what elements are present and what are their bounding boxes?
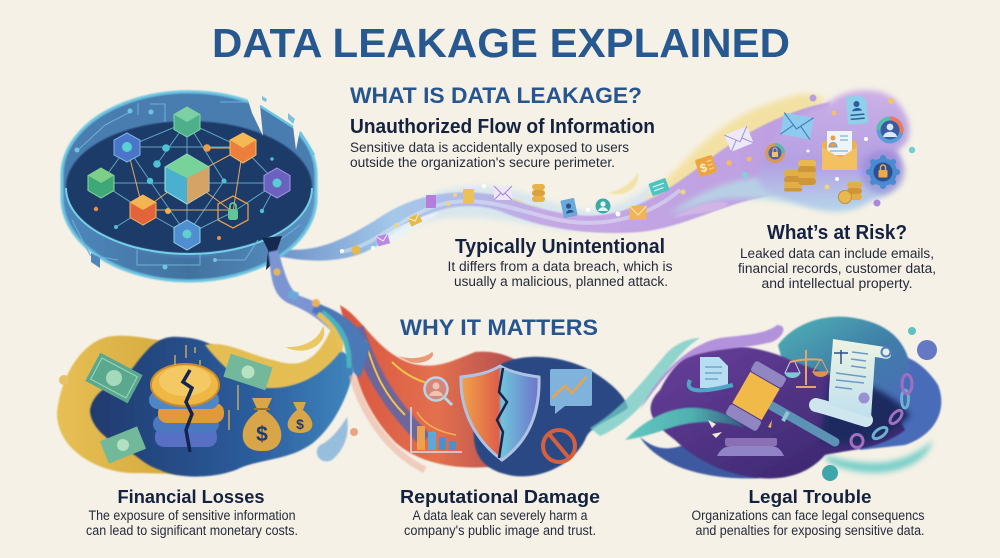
icon: coin card: [695, 155, 717, 177]
icon: banknote bottom left: [100, 426, 146, 464]
illustration: data stream flowing from the ring: [268, 90, 909, 261]
icon: lock gear large: [861, 150, 905, 194]
text block: legal trouble: Organizations can face legal consequencs: [692, 508, 925, 523]
icons on the data stream: [340, 94, 915, 254]
golden swoosh: [285, 326, 324, 351]
icon: impact sparks: [708, 420, 772, 438]
panel: reputational damage illustration: [340, 305, 628, 476]
icon: cracked coin stack: [149, 364, 224, 452]
icon: coin stacks: [784, 160, 816, 192]
icon: purple envelope: [376, 234, 390, 246]
icon: yellow document: [463, 189, 474, 204]
text block: what's at risk: [738, 222, 936, 291]
text block: what's at risk: What’s at Risk?: [767, 222, 907, 244]
teal inner stream: [625, 408, 745, 440]
icon: lock gear: [765, 143, 785, 163]
text block: unauthorized flow: outside the organization's secure perimeter.: [350, 155, 615, 170]
navy blob: [90, 337, 355, 477]
ring outer wall: [62, 92, 316, 281]
floating dots: [340, 94, 915, 253]
text block: financial losses: The exposure of sensitive information: [88, 508, 296, 523]
network links: [101, 122, 277, 235]
text block: legal trouble: Legal Trouble: [748, 486, 872, 507]
icon: no symbol: [543, 430, 575, 462]
teal blob: [778, 317, 909, 400]
data node: green left: [88, 168, 114, 198]
icon: yellow envelope: [408, 213, 422, 227]
ribbon teal band: [322, 312, 349, 368]
illustration: leak ribbon flowing down into the bottom panels: [268, 250, 370, 378]
purple swoosh: [640, 325, 783, 410]
icon: person card: [560, 198, 578, 218]
text block: unauthorized flow: [350, 116, 655, 170]
text block: financial losses: can lead to significant monetary costs.: [86, 523, 298, 538]
text block: what's at risk: Leaked data can include emails,: [740, 246, 934, 261]
text block: typically unintentional: Typically Unintentional: [455, 236, 665, 258]
icon: cracked shield: [461, 366, 539, 460]
data node: purple right: [264, 168, 290, 198]
gold blob: [57, 336, 178, 474]
icon: blue envelope: [780, 113, 814, 139]
broken wall fragments: [91, 96, 295, 268]
panel: financial losses illustration: [57, 325, 358, 477]
data node: orange lower: [130, 195, 156, 225]
text block: unauthorized flow: Sensitive data is accidentally exposed to users: [350, 140, 629, 155]
title: DATA LEAKAGE EXPLAINED: [212, 20, 790, 66]
purple blob: [651, 346, 905, 478]
icon: chat bubble trend: [550, 369, 592, 414]
icon: avatar circle: [596, 198, 610, 214]
icon: purple document: [426, 195, 436, 208]
icon: small coin stack: [838, 182, 862, 204]
illustration: data cloud blob: [758, 90, 909, 212]
ribbon small icons: [274, 268, 320, 307]
ribbon gold band: [318, 314, 340, 352]
text block: what's at risk: financial records, customer data,: [738, 261, 936, 276]
icon: coin: [352, 246, 360, 254]
data node: center: [165, 154, 209, 204]
text block: reputational damage: company's public image and trust.: [404, 523, 596, 538]
icon: document: [846, 95, 868, 125]
text block: unauthorized flow: Unauthorized Flow of Information: [350, 116, 655, 138]
data node: blue left: [114, 133, 140, 162]
fragment rim: [260, 106, 314, 155]
text block: reputational damage: Reputational Damage: [400, 486, 600, 507]
navy right lobe: [860, 354, 941, 450]
ring break lower right: [262, 236, 282, 270]
icon: money bag: $: [256, 423, 268, 446]
text block: typically unintentional: It differs from a data breach, which is: [448, 259, 673, 274]
data node: padlock hexagon: [218, 196, 248, 228]
icon: banknote top right: [223, 354, 273, 390]
icon: coin stack: [532, 184, 545, 202]
ring break upper right: [248, 85, 325, 155]
gold right band: [205, 325, 343, 388]
icon: falling bar chart: [411, 407, 462, 452]
text block: typically unintentional: [448, 236, 673, 289]
icon: teal card: [648, 178, 670, 196]
heading: what is data leakage: WHAT IS DATA LEAKAGE?: [350, 83, 642, 108]
network dots: [94, 144, 274, 240]
icon: white envelope: [725, 126, 753, 152]
icon: orange envelope: [630, 206, 646, 220]
ribbon gold streak: [365, 340, 435, 415]
text block: reputational damage: A data leak can severely harm a: [412, 508, 588, 523]
text block: what's at risk: and intellectual property.: [762, 276, 912, 291]
ribbon trunk: [268, 250, 358, 340]
ribbon fan: [312, 303, 370, 378]
navy lobe: [640, 437, 760, 478]
text block: legal trouble: [692, 486, 925, 538]
icon: magnifier person: [424, 378, 452, 405]
icon: open envelope: [822, 131, 857, 170]
text block: financial losses: Financial Losses: [118, 486, 264, 507]
data node: top green: [174, 107, 200, 137]
pale coral trail: [352, 375, 425, 470]
teardrop: [317, 417, 348, 461]
text block: reputational damage: [400, 486, 600, 538]
navy blob: [474, 357, 628, 476]
panel: legal trouble illustration: [590, 317, 941, 481]
icon: small money bag: $: [296, 416, 304, 432]
dot coral: [350, 428, 358, 436]
ring circuit traces: [72, 102, 300, 265]
icon: small money bag: [288, 402, 312, 433]
text block: financial losses: [86, 486, 298, 538]
data node: blue bottom: [174, 220, 200, 250]
icon: coin card: $: [698, 160, 709, 176]
icon: avatar ring: [876, 116, 904, 144]
dark center: [820, 375, 910, 444]
icon: legal scroll: [816, 339, 891, 420]
icon: lilac envelope: [494, 186, 512, 200]
red blob: [340, 305, 535, 467]
text block: typically unintentional: usually a malicious, planned attack.: [454, 274, 668, 289]
icon: gavel: [725, 360, 835, 442]
dot violet: [917, 340, 937, 360]
data node: orange right: [230, 133, 256, 163]
teal lower swoosh: [825, 440, 933, 473]
icon: document with arrow: [689, 357, 733, 390]
icon: money bag: [243, 398, 281, 451]
falling sparks: [175, 345, 238, 430]
icon: chain: [851, 374, 912, 448]
heading: why it matters: WHY IT MATTERS: [400, 315, 598, 340]
dark floor: [66, 121, 312, 253]
illustration: broken perimeter ring with data network: [62, 85, 325, 281]
icon: scales: [785, 350, 828, 387]
dot teal: [822, 465, 838, 481]
ribbon bands inside red: [356, 328, 425, 440]
dot teal small: [908, 327, 916, 335]
icon: banknote top left: [85, 353, 143, 403]
coral ripple: [398, 352, 433, 363]
dot gold: [59, 375, 69, 385]
icon: gavel base: [717, 438, 784, 456]
text block: legal trouble: and penalties for exposing sensitive data.: [696, 523, 924, 538]
pale teal swoosh: [590, 338, 700, 436]
ring trace dots: [74, 108, 217, 270]
